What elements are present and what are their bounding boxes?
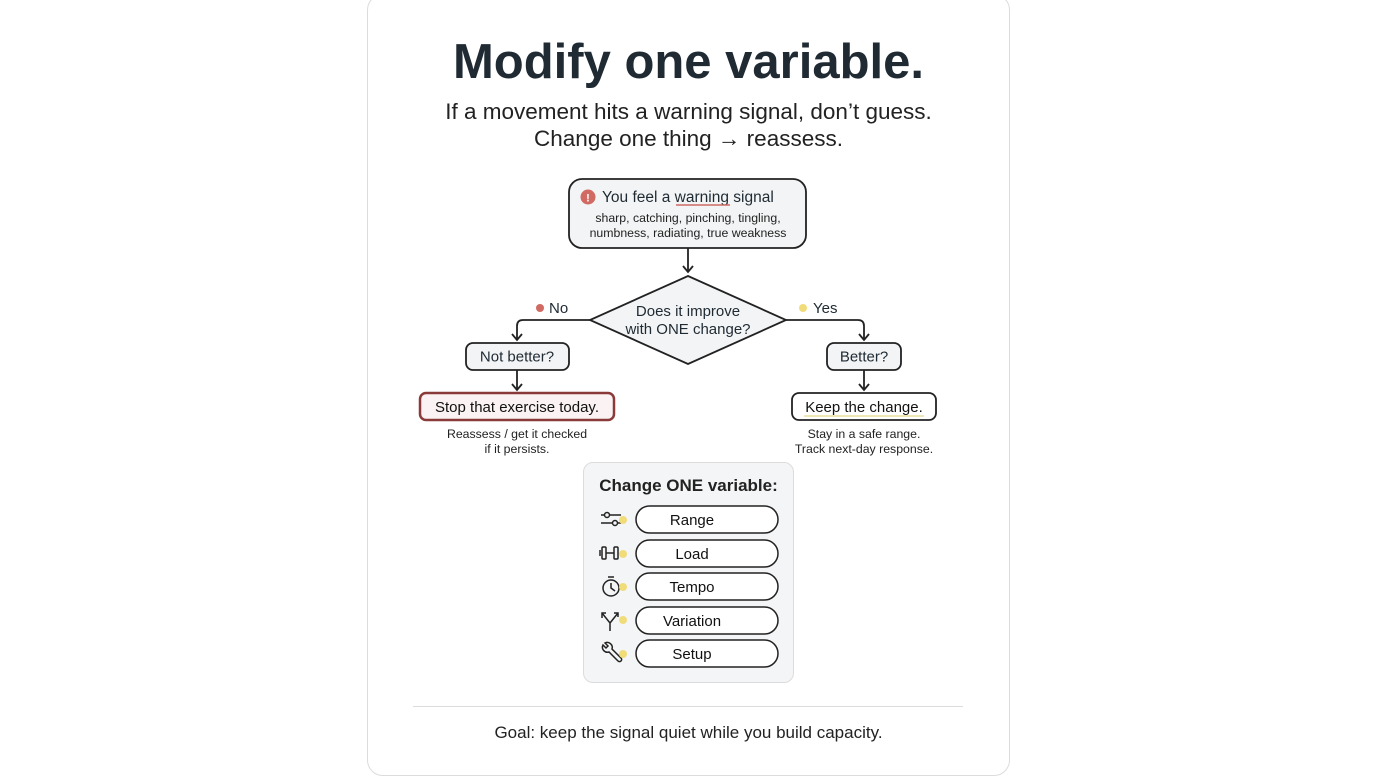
diamond: decision: Does it improve	[636, 303, 740, 320]
subtitle: Change one thing → reassess.	[534, 126, 843, 151]
note: keep: Stay in a safe range.	[808, 427, 920, 441]
pill: Range: Range	[670, 512, 714, 529]
icon: fork arrows	[602, 613, 627, 631]
title: Modify one variable.	[453, 35, 924, 89]
pill: Setup: Setup	[672, 646, 712, 663]
arrow: no branch	[512, 320, 590, 340]
box: warning signal: !	[586, 192, 590, 204]
box: keep change	[792, 393, 936, 420]
box: warning signal: numbness, radiating, true weakness	[590, 226, 786, 240]
panel heading: Change ONE variable:	[599, 476, 778, 495]
icon: sliders	[601, 512, 627, 526]
box: warning signal: sharp, catching, pinching, tingling,	[595, 211, 781, 225]
subtitle: If a movement hits a warning signal, don’t guess.	[445, 99, 932, 124]
box: not better: Not better?	[480, 348, 554, 366]
note: keep	[795, 427, 933, 456]
box: keep change: Keep the change.	[805, 399, 923, 416]
box: stop exercise: Stop that exercise today.	[435, 399, 599, 416]
diamond: decision: with ONE change?	[624, 321, 751, 338]
label: No	[536, 300, 568, 317]
icon: wrench	[602, 642, 627, 662]
pill: Variation: Variation	[663, 613, 721, 630]
icon: dumbbell	[600, 547, 627, 559]
label: No: No	[549, 300, 568, 317]
arrow: to keep	[859, 370, 869, 390]
variable list	[599, 505, 779, 668]
pill: Range	[636, 506, 778, 533]
box: stop exercise	[420, 393, 614, 420]
note: keep: Track next-day response.	[795, 442, 933, 456]
pill: Tempo: Tempo	[669, 579, 715, 596]
pill: Load: Load	[675, 546, 709, 563]
note: stop: Reassess / get it checked	[447, 427, 587, 441]
arrow: down to diamond	[683, 248, 693, 272]
arrow: to stop	[512, 370, 522, 390]
pill: Tempo	[636, 573, 778, 600]
label: Yes: Yes	[813, 300, 837, 317]
footer text: Goal: keep the signal quiet while you build capacity.	[494, 723, 883, 742]
diamond: decision	[590, 276, 786, 364]
pill: Variation	[636, 607, 778, 634]
icon: stopwatch	[603, 577, 627, 596]
box: warning signal	[569, 179, 806, 248]
panel: change one variable	[583, 462, 794, 683]
pill: Setup	[636, 640, 778, 667]
box: not better	[466, 343, 569, 370]
box: better: Better?	[840, 348, 888, 366]
note: stop: if it persists.	[485, 442, 549, 456]
box: better	[827, 343, 901, 370]
subtitle	[445, 99, 932, 151]
label: Yes	[799, 300, 837, 317]
pill: Load	[636, 540, 778, 567]
arrow: yes branch	[786, 320, 869, 340]
note: stop	[447, 427, 587, 456]
box: warning signal: You feel a warning signal	[602, 189, 774, 206]
card	[367, 0, 1010, 776]
